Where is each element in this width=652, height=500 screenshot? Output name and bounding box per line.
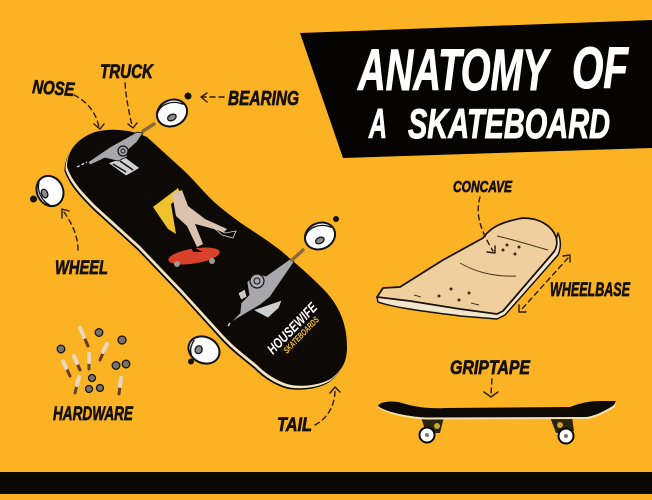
skateboards: SKATEBOARDS (281, 315, 321, 355)
deck thickness (377, 233, 560, 319)
deck (378, 401, 616, 420)
bearing left (30, 196, 37, 202)
bottom bar (0, 472, 652, 494)
main skateboard (64, 124, 347, 390)
arrow: griptape (484, 379, 498, 397)
graphic: legs on skateboard (153, 188, 236, 267)
hardware (57, 328, 130, 394)
nuts (57, 329, 130, 392)
label: tail: TAIL (277, 415, 312, 436)
top truck (77, 124, 154, 176)
side view skateboard (378, 401, 616, 444)
truck baseplate (108, 157, 140, 176)
wheels (420, 428, 434, 442)
label: wheel: WHEEL (55, 258, 108, 279)
wheel right (300, 218, 340, 254)
arrow: wheelbase (519, 255, 570, 312)
title line 2: A (368, 100, 387, 147)
bottom truck (228, 250, 303, 326)
truck hanger (230, 259, 294, 323)
trucks (421, 417, 444, 433)
legs (172, 190, 227, 247)
title line 1: OF (572, 36, 629, 101)
title line 1: ANATOMY (357, 38, 552, 103)
deck (67, 130, 347, 386)
bearing lower (188, 358, 194, 364)
truck hanger (88, 132, 143, 165)
label: truck: TRUCK (100, 62, 154, 83)
bearing top (184, 92, 192, 100)
arrow: bearing (201, 93, 224, 102)
deck edge (64, 134, 344, 390)
red board (167, 245, 221, 267)
wheel top (152, 95, 192, 131)
shoe (214, 228, 236, 238)
housewife: HOUSEWIFE (264, 299, 321, 357)
brand logo (264, 299, 321, 357)
yellow skirt (153, 188, 181, 234)
label: hardware: HARDWARE (53, 404, 134, 425)
arrow: wheel (62, 209, 78, 250)
label: griptape: GRIPTAPE (450, 358, 531, 379)
bearing right (333, 216, 339, 222)
truck baseplate (253, 300, 282, 318)
deck top (377, 218, 557, 314)
deck details (414, 236, 548, 305)
arrow: nose (74, 95, 104, 129)
arrow: truck (125, 83, 137, 128)
title banner (300, 20, 652, 158)
bolts (63, 328, 121, 394)
label: bearing: BEARING (228, 88, 299, 110)
concave deck illustration (377, 218, 560, 319)
arrow: tail (315, 387, 340, 425)
wheel left (32, 171, 68, 211)
label: concave: CONCAVE (453, 179, 513, 196)
label: nose: NOSE (32, 77, 76, 101)
wheel lower (184, 331, 224, 369)
arrow: concave (478, 197, 495, 253)
